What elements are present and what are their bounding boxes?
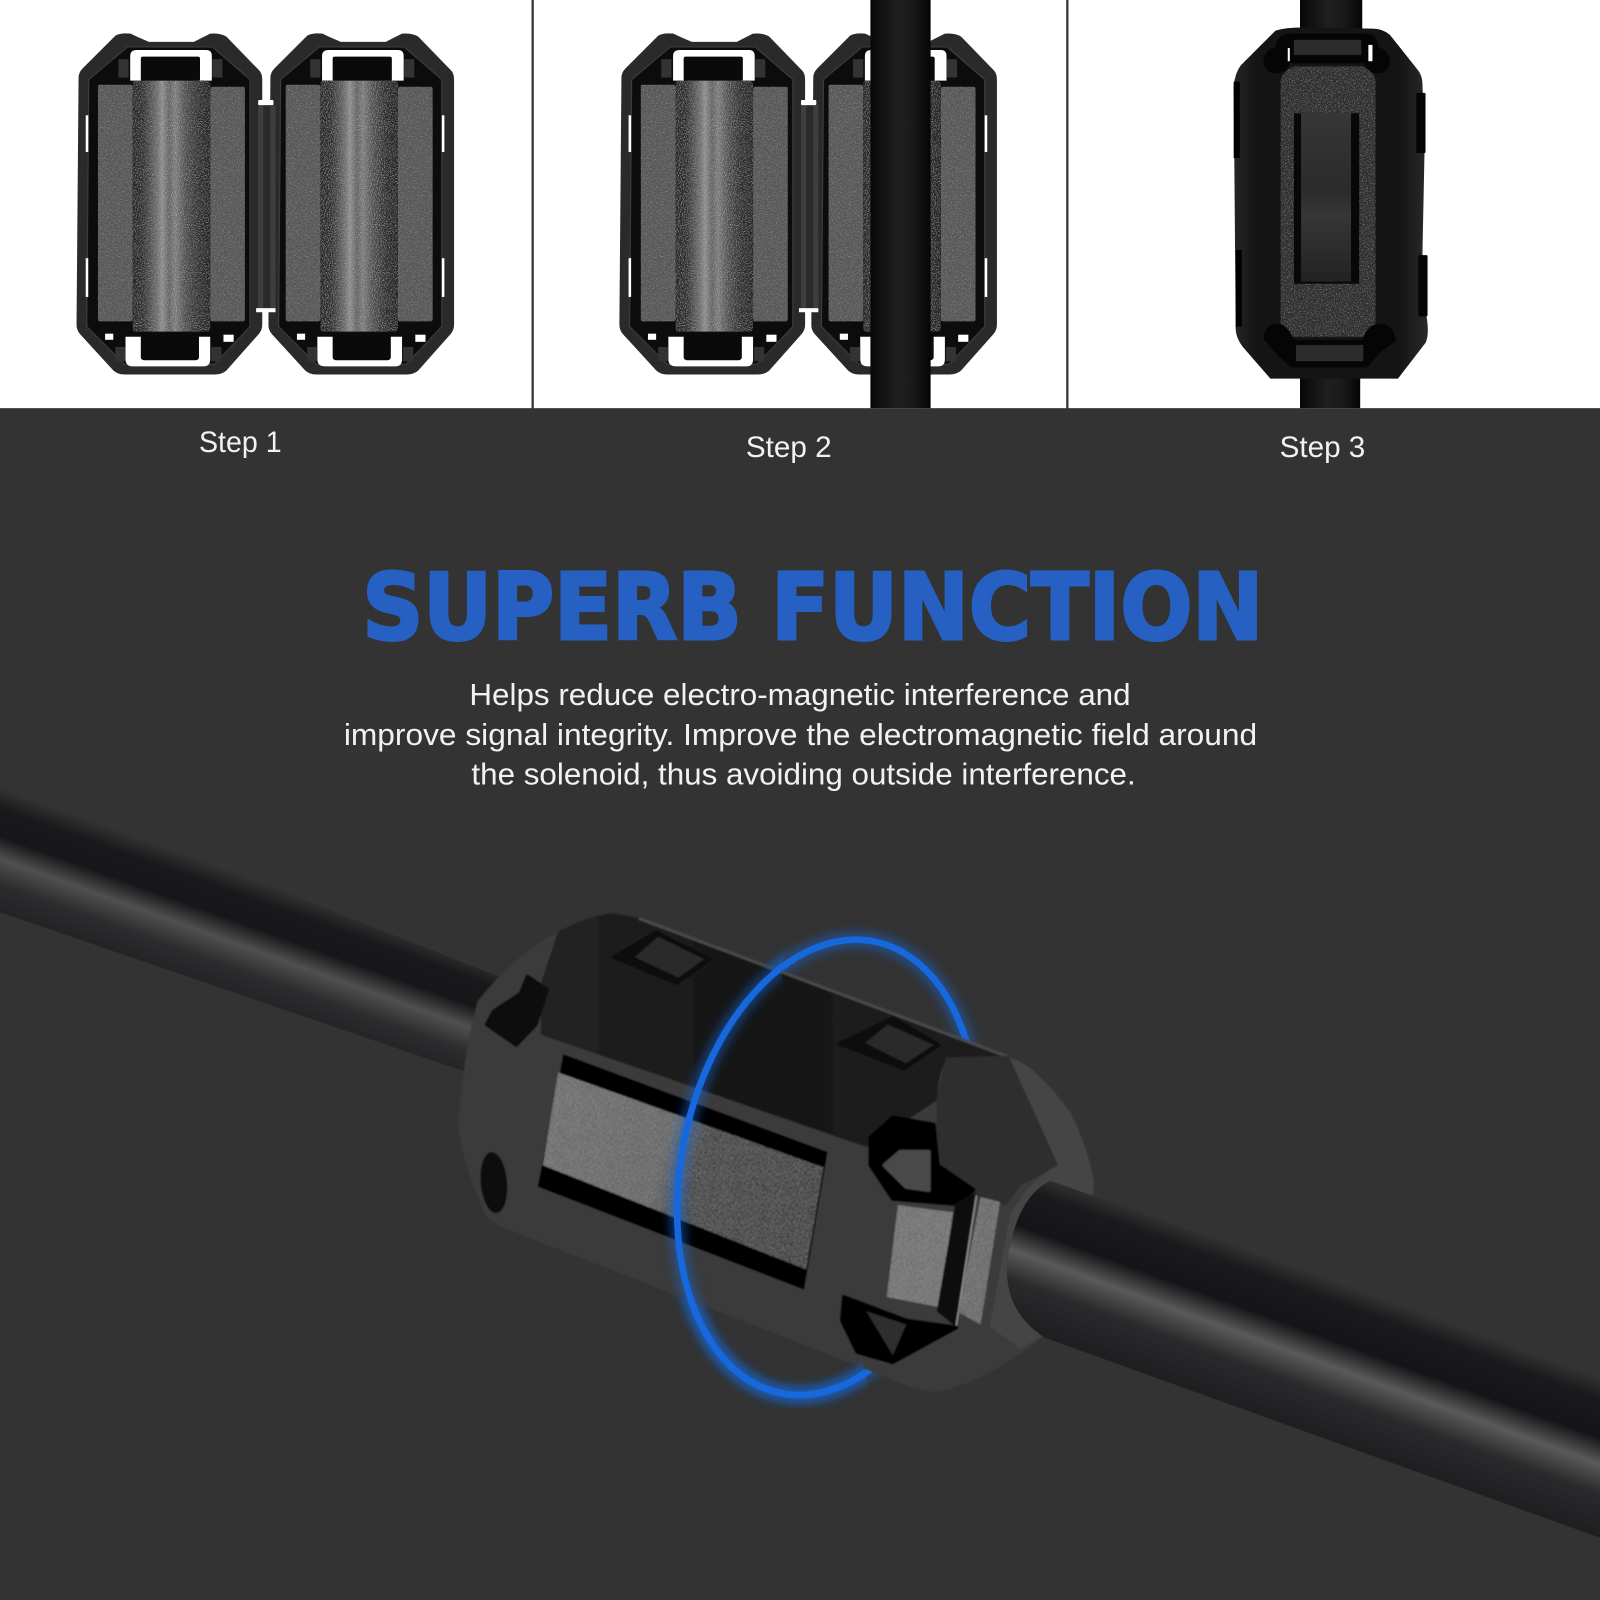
illustration: cable with ferrite clip and magnetic ring — [0, 780, 1600, 1538]
label: step 3: Step 3 — [1280, 431, 1365, 464]
icon: open clip with cable — [619, 0, 997, 408]
cable: left section — [0, 780, 571, 1108]
title: SUPERB FUNCTION — [362, 554, 1263, 661]
black gap — [937, 1192, 976, 1327]
text block: description: Helps reduce electro-magnetic interference and — [469, 678, 1131, 712]
text block: description — [344, 678, 1257, 792]
ring: back portion — [637, 912, 1018, 1423]
upper right pocket — [870, 1117, 973, 1204]
left holes — [487, 977, 547, 1045]
window slots — [538, 1054, 828, 1290]
clip end cap — [990, 1057, 1094, 1349]
clip body — [458, 913, 1094, 1392]
icon: open clip right half — [268, 33, 454, 374]
panel: step 1 photo — [0, 0, 532, 408]
ferrite core — [543, 1072, 823, 1269]
text block: description: improve signal integrity. Improve the electromagnetic field around — [344, 718, 1257, 752]
divider: step 1 and 2 — [532, 0, 534, 408]
ferrite block — [887, 1205, 953, 1307]
label: step 2: Step 2 — [746, 431, 832, 464]
cable: right section — [1007, 1181, 1600, 1538]
icon: clip hinge — [256, 71, 276, 331]
panel: step 2 photo — [534, 0, 1066, 408]
panel: step 3 photo — [1068, 0, 1600, 408]
ferrite side plate — [958, 1197, 1000, 1324]
divider: step 2 and 3 — [1066, 0, 1068, 408]
ring: front portion — [662, 948, 868, 1408]
icon: open clip left half — [77, 33, 262, 374]
text block: description: the solenoid, thus avoiding outside interference. — [471, 758, 1136, 792]
label: step 1: Step 1 — [199, 426, 282, 459]
icon: closed clip on cable — [1234, 0, 1428, 408]
clip shoulder — [938, 1057, 1058, 1204]
lower right pocket — [842, 1297, 956, 1362]
top slots — [612, 932, 710, 984]
clip top face — [541, 913, 1009, 1147]
